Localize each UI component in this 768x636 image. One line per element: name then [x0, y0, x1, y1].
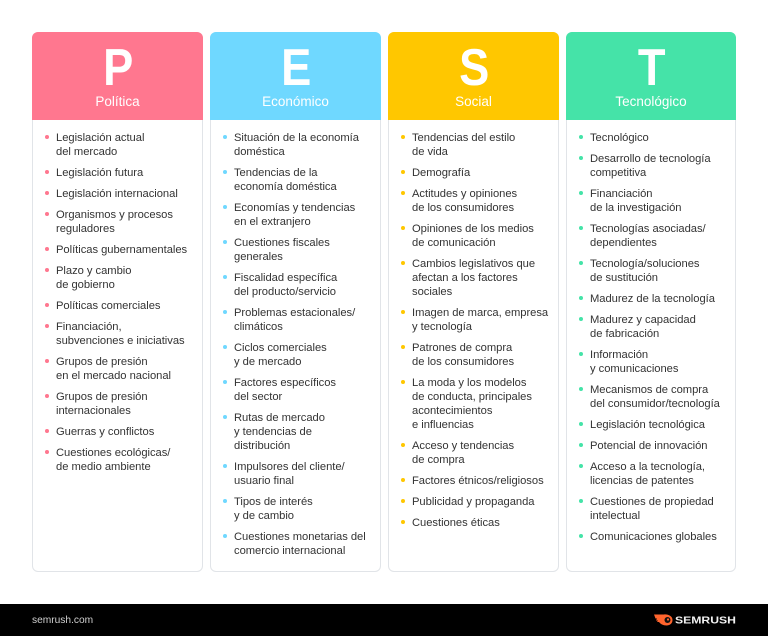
- list item: y de cambio: [234, 510, 294, 522]
- list item: del consumidor/tecnología: [590, 398, 720, 410]
- list item: Tipos de interés: [234, 496, 313, 508]
- list item: Legislación tecnológica: [590, 419, 705, 431]
- header: P Política: [32, 32, 203, 120]
- header: S Social: [388, 32, 559, 120]
- list item: reguladores: [56, 223, 115, 235]
- header: S Social: Social: [455, 94, 492, 109]
- list item: de gobierno: [56, 279, 115, 291]
- list item: Fiscalidad específica: [234, 272, 337, 284]
- list item: de vida: [412, 146, 448, 158]
- header: P Política: Política: [95, 94, 140, 109]
- list item: doméstica: [234, 146, 285, 158]
- list item: Potencial de innovación: [590, 440, 707, 452]
- header: E Económico: Económico: [262, 94, 329, 109]
- list item: climáticos: [234, 321, 283, 333]
- list item: Tecnologías asociadas/: [590, 223, 706, 235]
- list item: Acceso y tendencias: [412, 440, 514, 452]
- panel: Política: [32, 32, 203, 572]
- list item: Factores específicos: [234, 377, 336, 389]
- list item: [590, 495, 714, 523]
- list item: [56, 264, 131, 292]
- list item: Tecnológico: [590, 132, 649, 144]
- list item: Guerras y conflictos: [56, 426, 154, 438]
- list item: Cuestiones ecológicas/: [56, 447, 170, 459]
- header: S Social: S: [459, 39, 489, 97]
- header: E Económico: E: [281, 39, 311, 97]
- list item: de compra: [412, 454, 465, 466]
- list item: afectan a los factores: [412, 272, 518, 284]
- list item: Rutas de mercado: [234, 412, 325, 424]
- list item: Cuestiones éticas: [412, 517, 500, 529]
- list item: Tecnología/soluciones: [590, 258, 699, 270]
- list item: Cuestiones de propiedad: [590, 496, 714, 508]
- list item: [590, 257, 699, 285]
- list item: [56, 355, 171, 383]
- list item: Cuestiones fiscales: [234, 237, 330, 249]
- header: T Tecnológico: [566, 32, 736, 120]
- list item: La moda y los modelos: [412, 377, 526, 389]
- list item: Imagen de marca, empresa: [412, 307, 548, 319]
- list item: [412, 439, 514, 467]
- list item: de sustitución: [590, 272, 658, 284]
- list item: Cuestiones monetarias del: [234, 531, 366, 543]
- list item: Organismos y procesos: [56, 209, 173, 221]
- list item: [412, 222, 534, 250]
- list item: Opiniones de los medios: [412, 223, 534, 235]
- list item: distribución: [234, 440, 290, 452]
- list item: [234, 131, 359, 159]
- list item: acontecimientos: [412, 405, 492, 417]
- list item: Políticas gubernamentales: [56, 244, 187, 256]
- list item: [412, 306, 548, 334]
- list item: [590, 222, 706, 250]
- logo: Semrush: SEMRUSH: [675, 616, 736, 626]
- list item: economía doméstica: [234, 181, 337, 193]
- list item: Tendencias del estilo: [412, 132, 515, 144]
- panel: Económico: [210, 32, 381, 572]
- list item: intelectual: [590, 510, 640, 522]
- list item: Impulsores del cliente/: [234, 461, 345, 473]
- list item: sociales: [412, 286, 452, 298]
- list item: y tendencias de: [234, 426, 312, 438]
- list item: internacionales: [56, 405, 131, 417]
- list item: en el extranjero: [234, 216, 311, 228]
- list item: e influencias: [412, 419, 474, 431]
- list item: Tendencias de la: [234, 167, 318, 179]
- list item: [412, 187, 517, 215]
- header: P Política: P: [103, 39, 133, 97]
- list item: [412, 257, 535, 299]
- header: E Económico: [210, 32, 381, 120]
- list item: Ciclos comerciales: [234, 342, 327, 354]
- list item: [590, 313, 696, 341]
- list item: Información: [590, 349, 648, 361]
- list item: Patrones de compra: [412, 342, 512, 354]
- list item: Legislación actual: [56, 132, 144, 144]
- list item: Madurez y capacidad: [590, 314, 696, 326]
- list item: del producto/servicio: [234, 286, 336, 298]
- list item: [234, 460, 345, 488]
- list item: del mercado: [56, 146, 117, 158]
- list item: de los consumidores: [412, 202, 514, 214]
- list item: comercio internacional: [234, 545, 345, 557]
- list item: Comunicaciones globales: [590, 531, 717, 543]
- logo: Semrush: [654, 614, 736, 626]
- list item: [590, 187, 681, 215]
- list item: de los consumidores: [412, 356, 514, 368]
- list item: Financiación: [590, 188, 652, 200]
- list item: Economías y tendencias: [234, 202, 355, 214]
- list item: del sector: [234, 391, 282, 403]
- list item: licencias de patentes: [590, 475, 694, 487]
- list item: Mecanismos de compra: [590, 384, 708, 396]
- list item: [412, 376, 532, 432]
- list item: Legislación internacional: [56, 188, 178, 200]
- list item: Legislación futura: [56, 167, 143, 179]
- list item: [234, 201, 355, 229]
- list item: Problemas estacionales/: [234, 307, 355, 319]
- list item: y de mercado: [234, 356, 301, 368]
- list item: generales: [234, 251, 283, 263]
- list item: Factores étnicos/religiosos: [412, 475, 544, 487]
- list item: Acceso a la tecnología,: [590, 461, 705, 473]
- list item: dependientes: [590, 237, 657, 249]
- list item: de comunicación: [412, 237, 496, 249]
- list item: [234, 530, 366, 558]
- list item: de la investigación: [590, 202, 681, 214]
- list item: [590, 460, 705, 488]
- header: T Tecnológico: T: [637, 39, 665, 97]
- list item: [412, 341, 514, 369]
- list item: subvenciones e iniciativas: [56, 335, 185, 347]
- list item: Desarrollo de tecnología: [590, 153, 711, 165]
- list item: [234, 341, 327, 369]
- list item: Demografía: [412, 167, 470, 179]
- list item: Cambios legislativos que: [412, 258, 535, 270]
- list item: [590, 152, 711, 180]
- list item: [234, 236, 330, 264]
- list item: [590, 348, 678, 376]
- footer url: semrush.com: [32, 615, 93, 626]
- list item: de medio ambiente: [56, 461, 151, 473]
- panel: Social: [388, 32, 559, 572]
- list item: [234, 411, 325, 453]
- list item: [56, 446, 170, 474]
- list item: Publicidad y propaganda: [412, 496, 534, 508]
- list item: Grupos de presión: [56, 356, 148, 368]
- list item: Situación de la economía: [234, 132, 359, 144]
- list item: de fabricación: [590, 328, 659, 340]
- list item: Actitudes y opiniones: [412, 188, 517, 200]
- list item: Financiación,: [56, 321, 122, 333]
- footer bar: [0, 604, 768, 636]
- list item: Plazo y cambio: [56, 265, 131, 277]
- list item: [590, 383, 720, 411]
- list item: [56, 208, 173, 236]
- list item: Políticas comerciales: [56, 300, 160, 312]
- list item: Madurez de la tecnología: [590, 293, 715, 305]
- list item: y tecnología: [412, 321, 472, 333]
- list item: de conducta, principales: [412, 391, 532, 403]
- list item: [234, 495, 313, 523]
- header: T Tecnológico: Tecnológico: [615, 94, 687, 109]
- list item: [56, 131, 144, 159]
- list item: [234, 376, 336, 404]
- list item: [412, 131, 515, 159]
- list item: [56, 390, 148, 418]
- list item: en el mercado nacional: [56, 370, 171, 382]
- list item: usuario final: [234, 475, 294, 487]
- list item: [234, 271, 337, 299]
- list item: y comunicaciones: [590, 363, 678, 375]
- list item: [234, 166, 337, 194]
- list item: competitiva: [590, 167, 646, 179]
- panel: Tecnológico: [566, 32, 736, 572]
- list item: Grupos de presión: [56, 391, 148, 403]
- list item: [56, 320, 185, 348]
- list item: [234, 306, 355, 334]
